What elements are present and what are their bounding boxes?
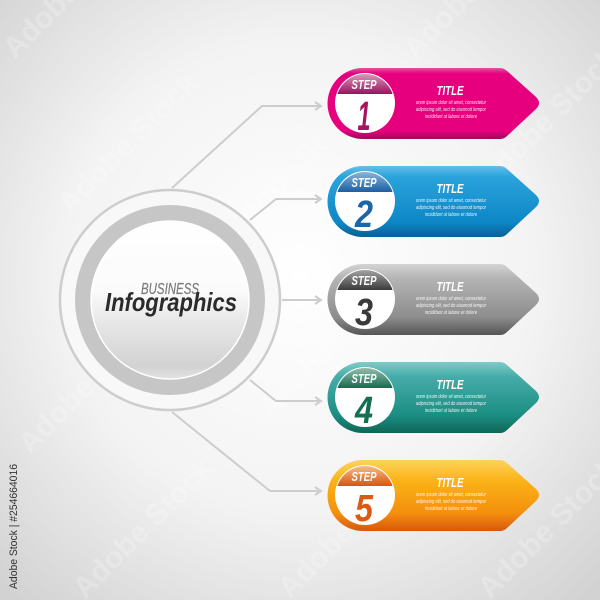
step 5: 5 [355,488,374,530]
step 2: orem ipsum dolor sit amet, consectetur [416,198,486,204]
step 1: 1 [358,93,370,139]
step 3: incididunt ut labore et dolore [425,310,477,316]
step 1: STEP [352,77,377,92]
step 2: adipiscing elit, sed do eiusmod tempor [416,205,486,211]
step 5: orem ipsum dolor sit amet, consectetur [416,492,486,498]
step 3 [328,264,539,335]
heading: business: BUSINESS [141,281,199,298]
heading: infographics: Infographics [105,287,237,317]
step 1 [328,68,539,139]
step 1: adipiscing elit, sed do eiusmod tempor [416,107,486,113]
step 2: incididunt ut labore et dolore [425,212,477,218]
step 4: STEP [352,371,377,386]
watermark: Adobe Stock [52,67,205,220]
watermark: Adobe Stock [12,307,165,460]
step 5 [328,460,539,531]
central circle [60,190,280,410]
step 5: incididunt ut labore et dolore [425,506,477,512]
step 2: TITLE [436,181,464,196]
step 1: incididunt ut labore et dolore [425,114,477,120]
step 3: adipiscing elit, sed do eiusmod tempor [416,303,486,309]
step 2: 2 [354,194,373,236]
step 5: TITLE [436,475,464,490]
step 1: orem ipsum dolor sit amet, consectetur [416,100,486,106]
step 4: 4 [354,390,373,432]
connector lines with arrows [172,102,321,495]
step 3: orem ipsum dolor sit amet, consectetur [416,296,486,302]
step 2: STEP [352,175,377,190]
step 4: adipiscing elit, sed do eiusmod tempor [416,401,486,407]
step 4: TITLE [436,377,464,392]
step 4: orem ipsum dolor sit amet, consectetur [416,394,486,400]
step 3: TITLE [436,279,464,294]
stock id label: Adobe Stock | #254664016 [8,464,20,589]
step 3: 3 [355,292,373,334]
step 2 [328,166,539,237]
step 3: STEP [352,273,377,288]
step 5: adipiscing elit, sed do eiusmod tempor [416,499,486,505]
step 4: incididunt ut labore et dolore [425,408,477,414]
watermark: Adobe Stock [217,92,370,245]
watermark: Adobe Stock [252,272,405,425]
step 4 [328,362,539,433]
step 5: STEP [352,469,377,484]
step 1: TITLE [436,83,464,98]
